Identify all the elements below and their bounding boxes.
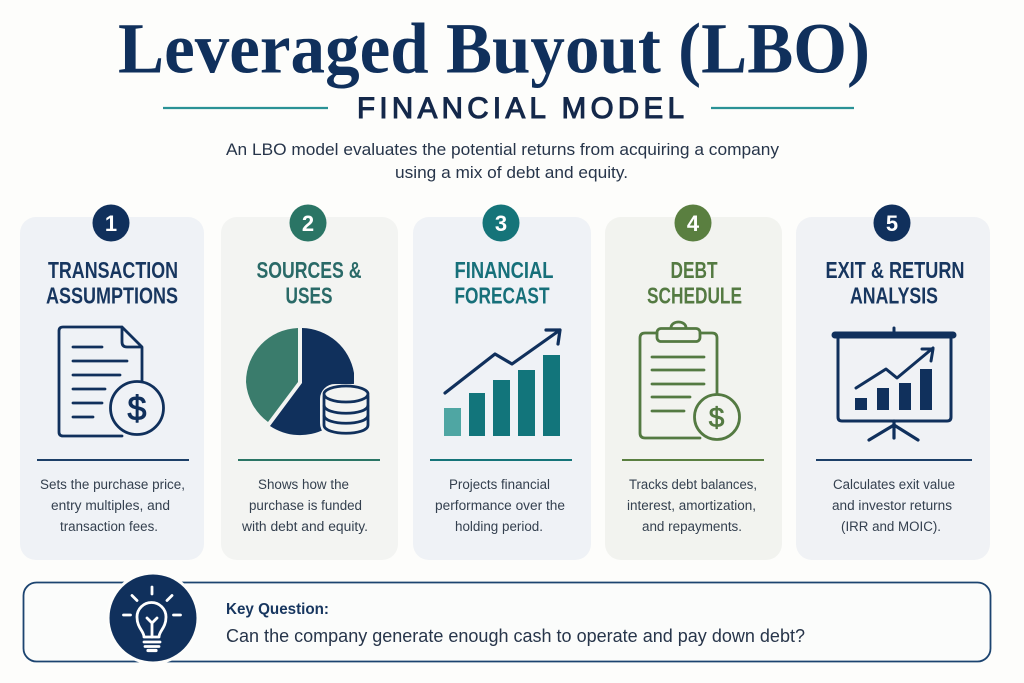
icon: bar chart with rising arrow: [444, 330, 560, 436]
description: entry multiples, and: [51, 498, 170, 513]
step number 4: [674, 204, 712, 242]
key question text: Can the company generate enough cash to operate and pay down debt?: [226, 626, 805, 646]
step number 4: 4: [687, 211, 700, 236]
icon: clipboard with dollar: $: [709, 402, 725, 433]
heading: USES: [286, 282, 332, 308]
description: with debt and equity.: [241, 519, 368, 534]
step number 2: [290, 204, 326, 242]
title: Leveraged Buyout (LBO): [118, 8, 870, 88]
description: interest, amortization,: [627, 498, 756, 513]
intro text: An LBO model evaluates the potential returns from acquiring a company: [226, 141, 780, 159]
intro text: using a mix of debt and equity.: [395, 164, 628, 182]
step number 3: [482, 204, 520, 242]
description: performance over the: [435, 498, 565, 513]
heading: [647, 257, 742, 308]
panel: exit and return analysis: [796, 204, 990, 560]
step number 5: [874, 204, 910, 242]
description: and repayments.: [642, 519, 742, 534]
subtitle: FINANCIAL MODEL: [357, 92, 684, 125]
heading: FORECAST: [454, 282, 550, 308]
icon: document with dollar: $: [128, 390, 147, 428]
step number 5: 5: [886, 211, 898, 236]
panel: transaction assumptions: [20, 204, 204, 560]
key question label: Key Question:: [226, 601, 329, 618]
icon: document with dollar: [59, 327, 164, 436]
heading: [826, 257, 964, 308]
heading: DEBT: [670, 257, 718, 283]
heading: [46, 257, 178, 308]
heading: [454, 257, 554, 308]
description: [627, 477, 757, 534]
step number 1: [92, 204, 130, 242]
description: transaction fees.: [60, 519, 158, 534]
description: [832, 477, 955, 534]
heading: FINANCIAL: [454, 257, 554, 283]
icon: light bulb: [106, 572, 200, 664]
description: (IRR and MOIC).: [841, 519, 941, 534]
description: [241, 477, 368, 534]
description: and investor returns: [832, 498, 952, 513]
description: Projects financial: [449, 477, 550, 492]
icon: clipboard with dollar: [640, 322, 740, 440]
panel: sources and uses: [221, 204, 398, 560]
description: [435, 477, 565, 534]
icon: pie chart with coins: [246, 328, 369, 435]
description: holding period.: [455, 519, 543, 534]
heading: [256, 257, 362, 308]
description: [40, 477, 185, 534]
description: Tracks debt balances,: [629, 477, 757, 492]
heading: ASSUMPTIONS: [46, 282, 178, 308]
heading: TRANSACTION: [48, 257, 178, 283]
heading: ANALYSIS: [850, 282, 938, 308]
intro text: [226, 141, 780, 182]
step number 2: 2: [302, 211, 314, 236]
heading: SCHEDULE: [647, 282, 742, 308]
step number 1: 1: [105, 211, 117, 236]
heading: SOURCES &: [256, 257, 362, 283]
icon: presentation board: [835, 328, 953, 440]
panel: financial forecast: [413, 204, 591, 560]
step number 3: 3: [495, 211, 507, 236]
description: Calculates exit value: [833, 477, 955, 492]
description: purchase is funded: [249, 498, 362, 513]
panel: debt schedule: [605, 204, 782, 560]
description: Shows how the: [258, 477, 349, 492]
description: Sets the purchase price,: [40, 477, 185, 492]
heading: EXIT & RETURN: [826, 257, 964, 283]
callout: key question: [24, 572, 990, 664]
